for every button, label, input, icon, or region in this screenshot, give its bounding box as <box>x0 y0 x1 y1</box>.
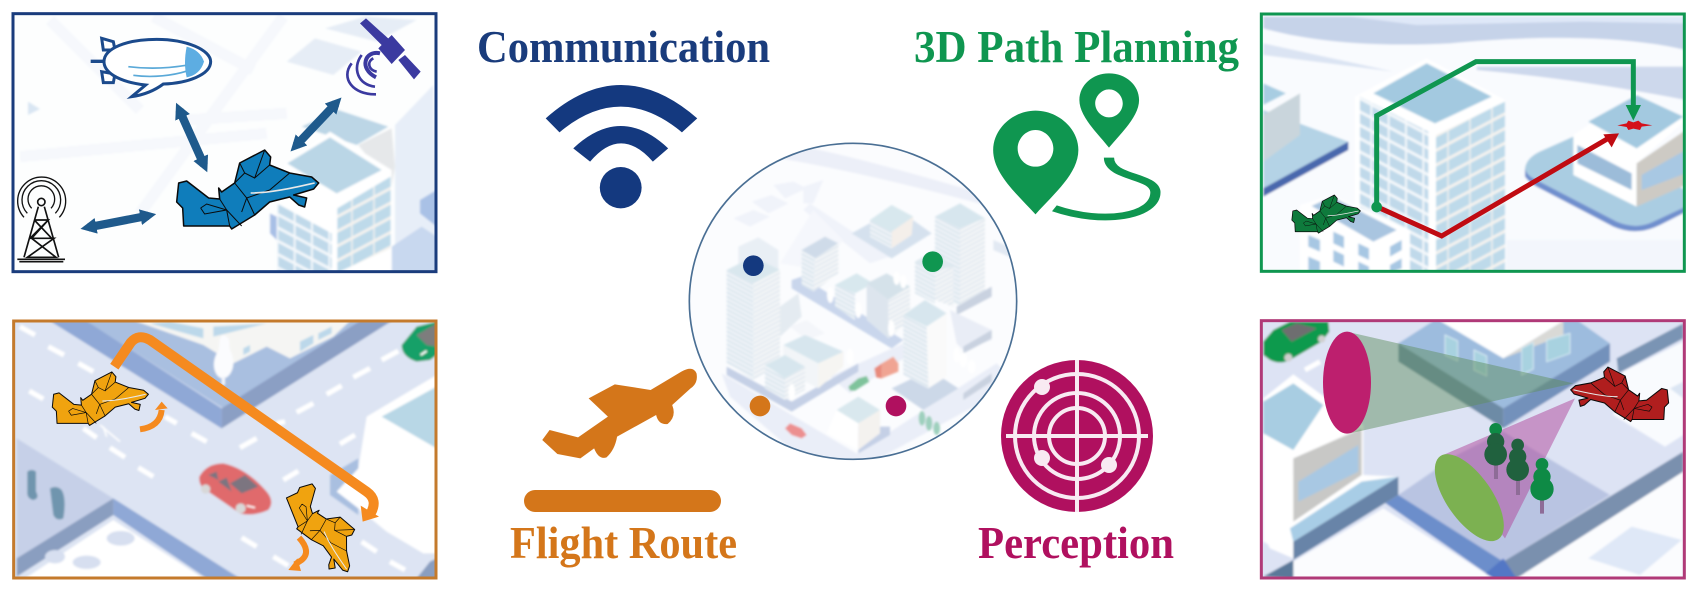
arrowhead: orange route <box>361 506 379 522</box>
marker: perception dot <box>886 396 906 416</box>
trees <box>788 276 907 398</box>
panel border <box>14 321 436 578</box>
building: top right tower <box>935 203 992 315</box>
icon: radar target <box>1001 360 1153 512</box>
icon: red aircraft <box>1571 367 1669 422</box>
heading: Flight Route: Flight Route <box>510 517 737 568</box>
route: red ground path <box>1377 133 1619 236</box>
building: big left tower <box>727 237 802 380</box>
arrow: takeoff direction <box>140 402 168 429</box>
beam: magenta sensor field <box>1442 398 1575 538</box>
central city circle <box>689 143 1017 463</box>
icon: runway bar <box>524 490 721 512</box>
building: green dot block <box>915 250 953 307</box>
car: green <box>402 322 437 362</box>
icon: map pins and path <box>993 73 1155 217</box>
arrow: satellite link <box>296 103 336 146</box>
building: small rooftop block <box>852 205 932 258</box>
panel: flight route <box>12 321 437 583</box>
shape: magenta footprint <box>1323 332 1371 434</box>
panel: perception <box>1260 320 1686 578</box>
panel: 3D path planning <box>1260 13 1686 273</box>
panel border <box>1261 14 1684 271</box>
icon: cell tower <box>17 177 66 262</box>
icon: airship <box>91 38 211 97</box>
heading: 3D Path Planning: 3D Path Planning <box>914 21 1239 72</box>
building: mid tower <box>802 237 838 292</box>
car: red <box>199 463 271 514</box>
beam: green sensor field <box>1347 332 1573 433</box>
building: front tower <box>892 300 958 410</box>
icon: green aircraft <box>1292 195 1360 233</box>
icon: orange aircraft takeoff <box>52 372 148 425</box>
car: green <box>1263 322 1329 362</box>
marker: path planning dot <box>922 251 943 272</box>
heading: Communication: Communication <box>477 21 770 72</box>
building: lower left block <box>764 334 842 400</box>
marker: communication dot <box>743 255 764 276</box>
marker: flight route dot <box>750 396 770 416</box>
shape: green footprint <box>1422 443 1517 552</box>
icon: plane silhouette <box>542 369 697 458</box>
icon: wifi <box>546 85 697 208</box>
panel: communication <box>12 13 437 273</box>
heading: Perception: Perception <box>978 517 1174 568</box>
icon: satellite <box>347 18 421 94</box>
icon: blue aircraft <box>177 150 319 229</box>
icon: target marker <box>1617 121 1652 130</box>
icon: trees <box>1484 423 1554 514</box>
route: green 3D path <box>1371 62 1641 212</box>
route: orange flight path <box>114 337 374 513</box>
vehicle: red car <box>785 423 807 438</box>
arrow: landing direction <box>288 538 306 571</box>
vehicle: truck <box>874 357 898 378</box>
panel border <box>13 14 436 272</box>
building: white lower block <box>838 396 891 454</box>
panel border <box>1261 321 1684 578</box>
building: central blocks <box>835 273 910 338</box>
icon: orange aircraft landing <box>283 474 368 583</box>
arrow: airship link <box>179 110 204 165</box>
vehicle: green car <box>848 376 869 391</box>
arrow: tower link <box>88 216 148 227</box>
